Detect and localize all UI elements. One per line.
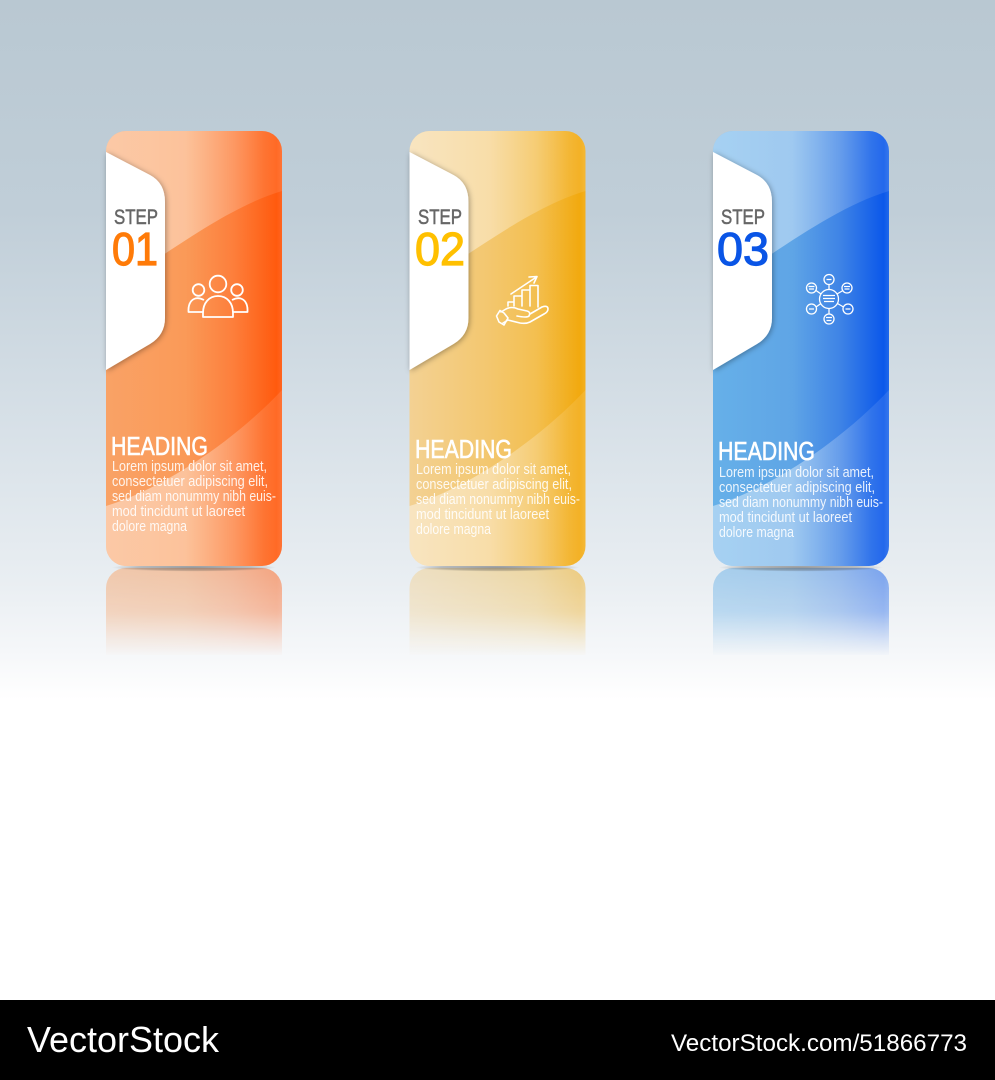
card 2 white tab <box>410 152 468 370</box>
card 3 bottom gloss <box>713 390 889 566</box>
card 1 step label: STEP <box>114 206 158 229</box>
card 1 bottom gloss <box>106 390 282 566</box>
card 2 body text: dolore magna <box>416 522 492 538</box>
card 2 body text: sed diam nonummy nibh euis- <box>416 492 580 508</box>
card 3 floor shadow <box>719 564 883 572</box>
card 3 top gloss <box>713 131 889 292</box>
card 2 body text: consectetuer adipiscing elit, <box>416 477 572 493</box>
card 1 body <box>106 131 282 566</box>
card 1: orange step 01 <box>106 131 282 655</box>
card 2 step number: 02 <box>415 223 465 275</box>
card 3 body text: dolore magna <box>719 525 795 541</box>
card 1 top gloss <box>106 131 282 292</box>
card 2 body text: mod tincidunt ut laoreet <box>416 507 549 523</box>
card 1 step number: 01 <box>112 223 158 275</box>
card 3 white tab <box>713 152 772 370</box>
card 3 body <box>713 131 889 566</box>
card 3 reflection <box>713 568 889 655</box>
card 1 heading: HEADING <box>111 431 208 461</box>
card 3: blue step 03 <box>713 131 889 655</box>
card 2 body <box>410 131 586 566</box>
card 2 reflection <box>410 568 586 655</box>
card 1 body text: Lorem ipsum dolor sit amet, <box>112 459 267 475</box>
card 2 bottom gloss <box>410 390 586 566</box>
footer brand name: VectorStock <box>27 1019 220 1060</box>
card 2 heading: HEADING <box>415 434 512 464</box>
card 3 step number: 03 <box>717 223 769 275</box>
card 1 floor shadow <box>112 564 276 572</box>
icon: network of speech bubbles <box>806 274 853 324</box>
card 1 body text: sed diam nonummy nibh euis- <box>112 489 276 505</box>
card 2: yellow step 02 <box>410 131 586 655</box>
card 2 body text: Lorem ipsum dolor sit amet, <box>416 462 571 478</box>
card 1 white tab <box>106 152 165 370</box>
card 1 body text: dolore magna <box>112 519 188 535</box>
card 3 body text: consectetuer adipiscing elit, <box>719 480 875 496</box>
card 1 body text <box>112 459 276 535</box>
background gradient <box>0 0 995 700</box>
card 3 body text: sed diam nonummy nibh euis- <box>719 495 883 511</box>
card 1 reflection <box>106 568 282 655</box>
card 2 top gloss <box>410 131 586 292</box>
card 3 body text: Lorem ipsum dolor sit amet, <box>719 465 874 481</box>
icon: hand holding growth chart <box>496 276 548 325</box>
footer url: VectorStock.com/51866773 <box>671 1030 967 1057</box>
card 2 floor shadow <box>416 564 580 572</box>
card 3 heading: HEADING <box>718 436 815 466</box>
card 3 step label: STEP <box>721 206 765 229</box>
card 3 body text <box>719 465 883 541</box>
card 1 body text: mod tincidunt ut laoreet <box>112 504 245 520</box>
watermark footer bar <box>0 1000 995 1080</box>
card 3 body text: mod tincidunt ut laoreet <box>719 510 852 526</box>
icon: people <box>188 276 248 317</box>
card 2 body text <box>416 462 580 538</box>
card 2 step label: STEP <box>418 206 462 229</box>
card 1 body text: consectetuer adipiscing elit, <box>112 474 268 490</box>
